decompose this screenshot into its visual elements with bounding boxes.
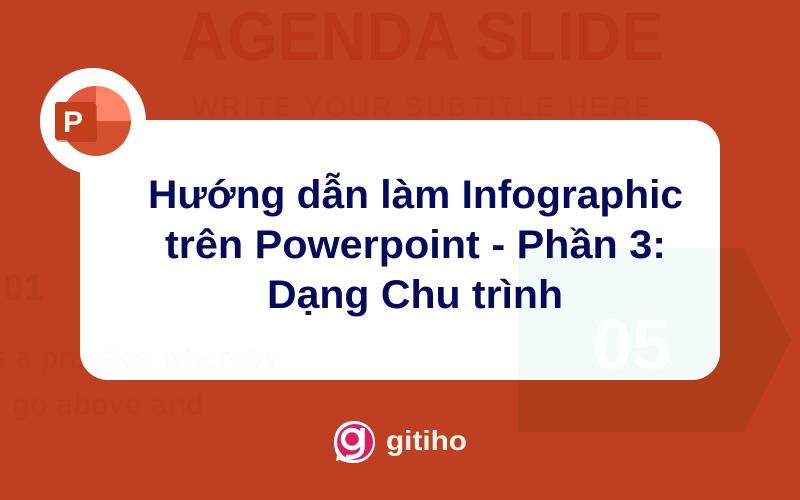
main heading: Hướng dẫn làm Infographic	[148, 171, 683, 217]
ghost body text: go above and	[12, 388, 204, 421]
P tile	[55, 102, 95, 140]
arrow shape 05	[518, 248, 791, 432]
white circle	[40, 68, 146, 174]
pie top right quarter	[96, 86, 131, 121]
gitiho logo	[334, 421, 467, 463]
P tile shadow	[56, 104, 97, 142]
wordmark: gitiho	[386, 425, 467, 456]
icon: gitiho mark	[334, 421, 375, 463]
arrow tint on card	[518, 248, 720, 380]
ghost title: AGENDA SLIDE	[181, 0, 664, 75]
main heading: trên Powerpoint - Phần 3:	[165, 223, 666, 267]
ghost number 05 and body text on card	[80, 306, 672, 380]
main heading: Dạng Chu trình	[267, 273, 563, 317]
pie bottom half	[61, 121, 131, 156]
ghost subtitle: WRITE YOUR SUBTITLE HERE	[192, 91, 652, 122]
P letter: P	[63, 106, 83, 139]
ghost body text: s a practice whereby	[0, 341, 280, 374]
icon: PowerPoint logo badge	[40, 68, 146, 172]
ghost body text	[0, 341, 280, 421]
ghost number 01: 01	[3, 267, 44, 308]
white title card	[80, 120, 720, 380]
pie top left quarter	[61, 86, 96, 121]
